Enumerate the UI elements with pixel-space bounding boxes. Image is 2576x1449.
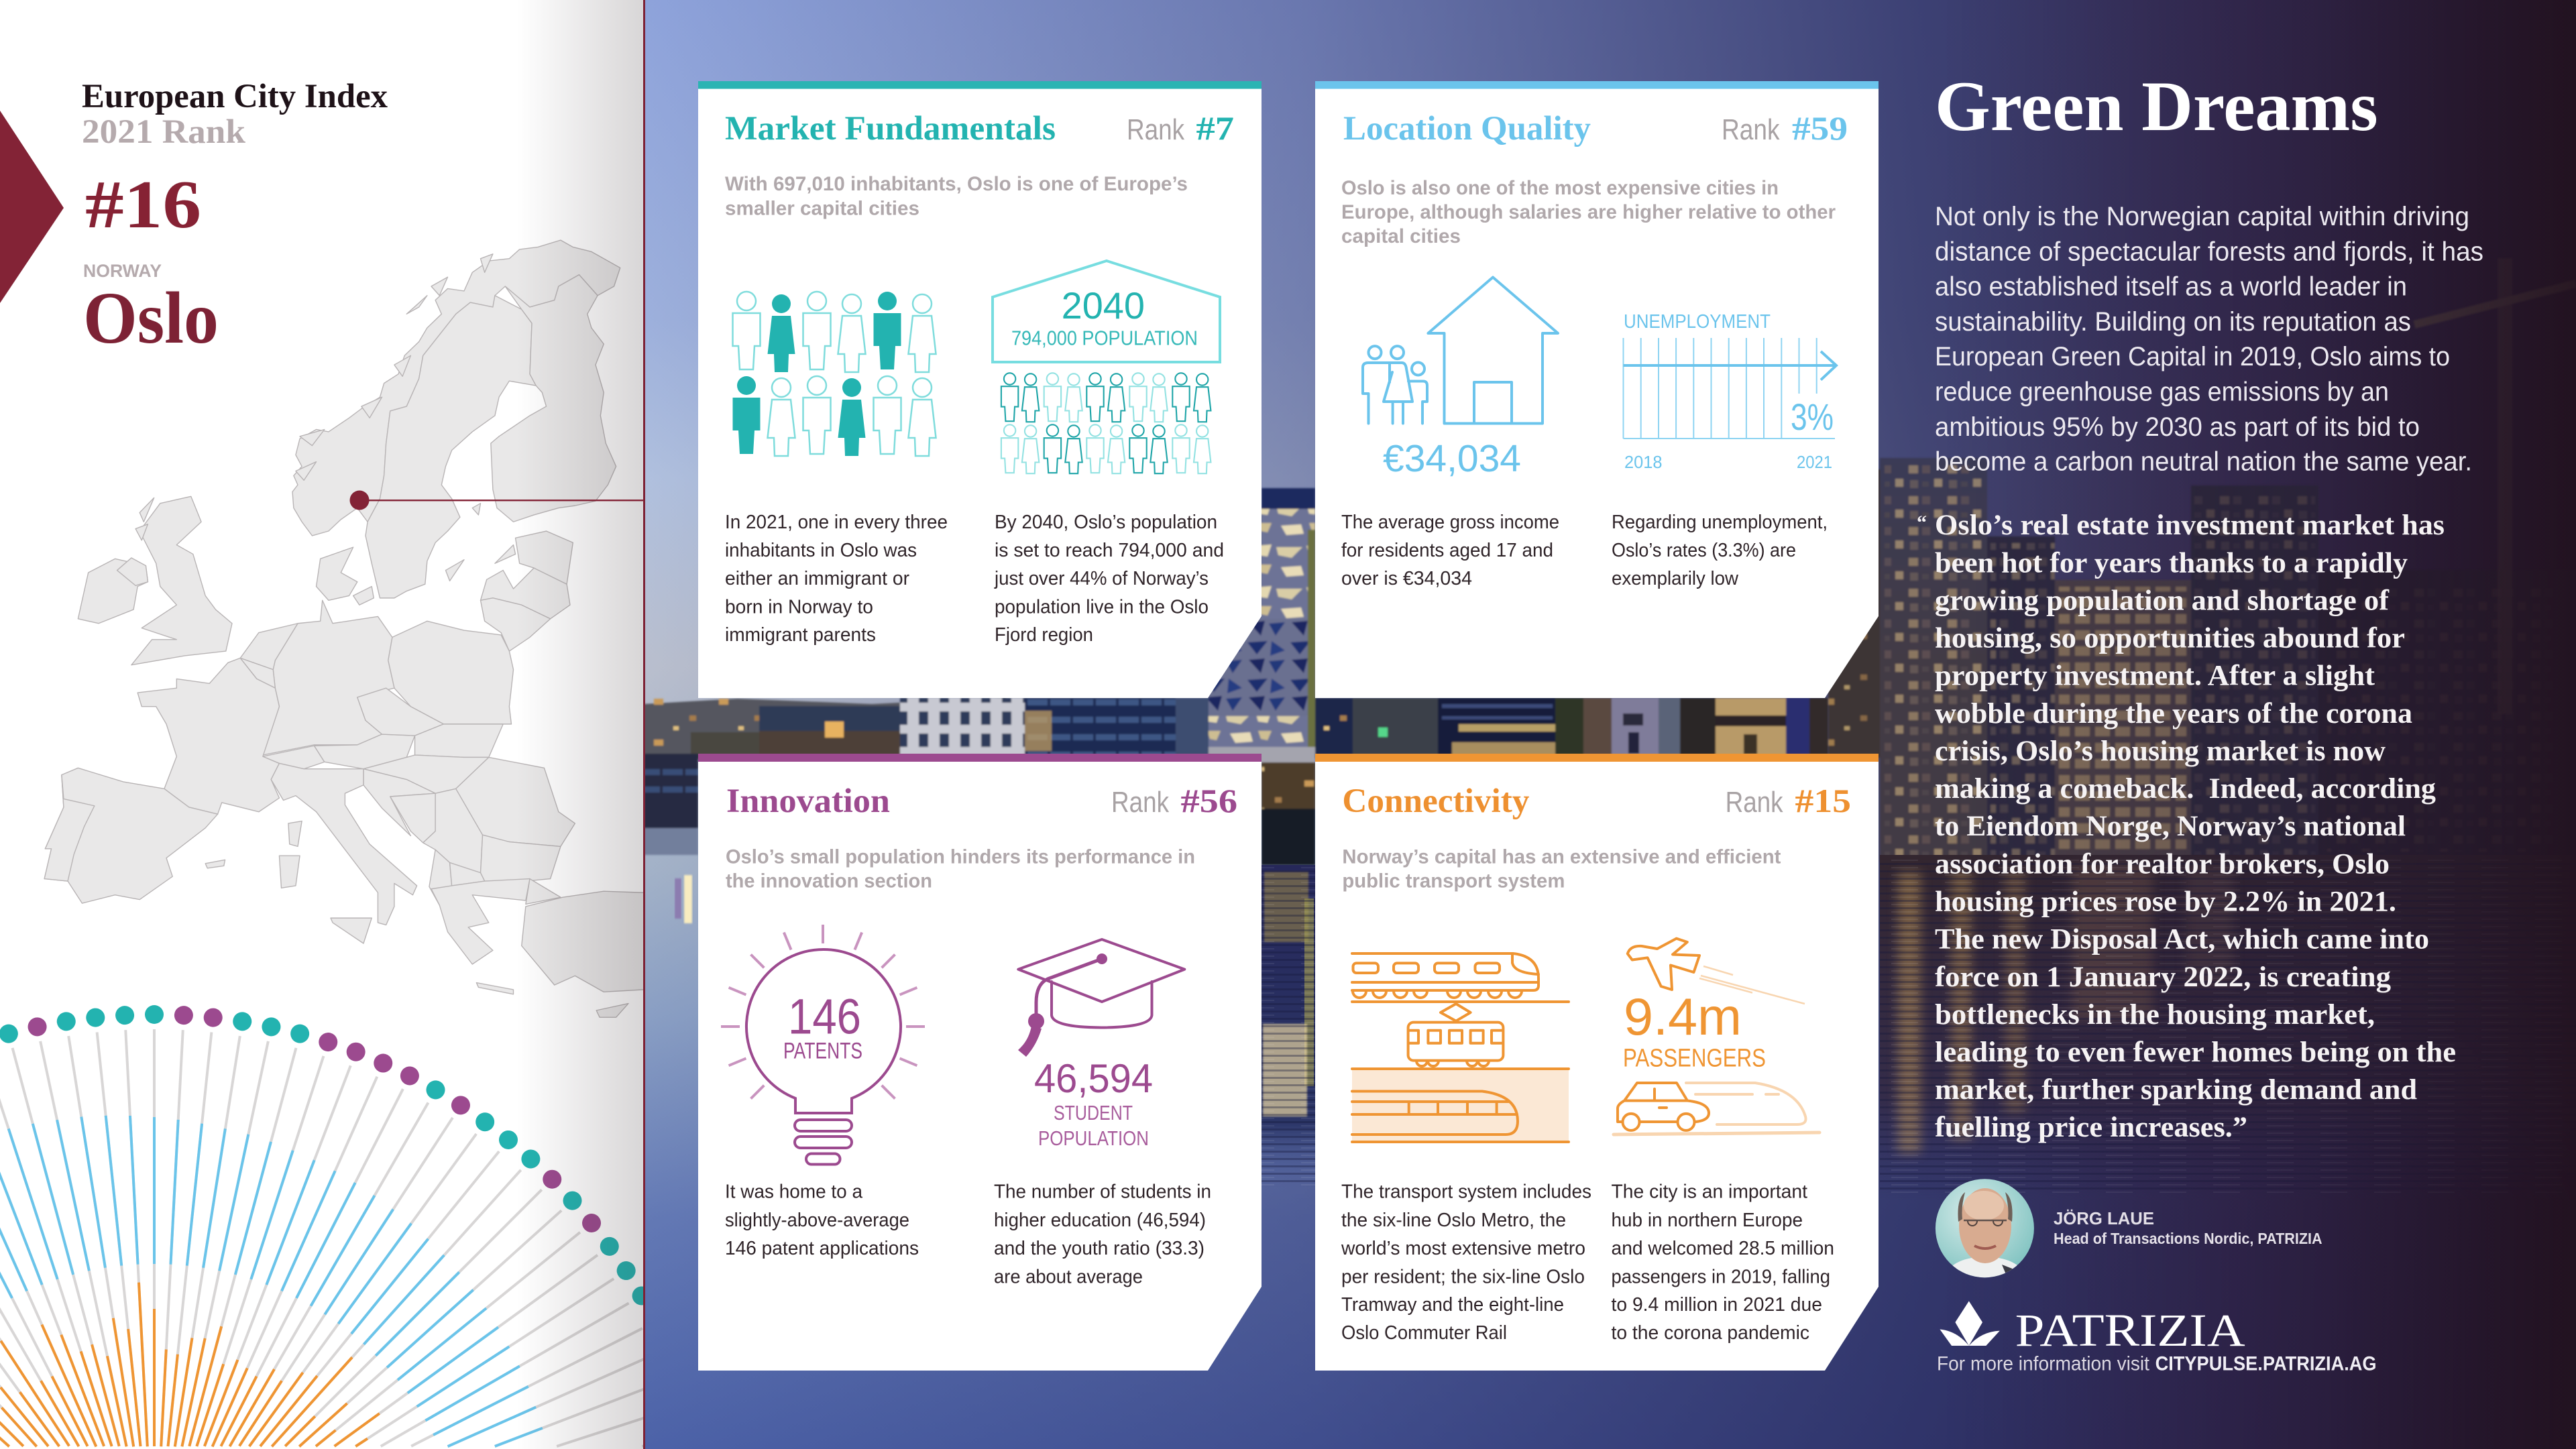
body text: immigrants: born in Norway to — [725, 597, 873, 618]
portrait of Jörg Laue — [1936, 1179, 2034, 1278]
body text: population forecast: just over 44% of Norway’s — [994, 568, 1209, 589]
body text: immigrants — [725, 512, 948, 646]
body text: transport system: The transport system includes — [1341, 1181, 1591, 1203]
body text: immigrants: In 2021, one in every three — [725, 512, 948, 533]
body text: unemployment: Regarding unemployment, — [1612, 512, 1828, 533]
left panel: white index column — [0, 0, 683, 1449]
pull quote: housing, so opportunities abound for — [1935, 623, 2405, 654]
rank — [1127, 109, 1234, 147]
body text: air passengers: to 9.4 million in 2021 due — [1611, 1294, 1822, 1316]
radial city ranking chart — [0, 1005, 683, 1449]
panel: Innovation — [698, 754, 1262, 1371]
pull quote: property investment. After a slight — [1935, 660, 2375, 692]
map of Europe — [44, 240, 644, 1017]
rank: Rank — [1726, 786, 1783, 819]
intro paragraph: become a carbon neutral nation the same year. — [1935, 447, 2472, 477]
heading: Connectivity — [1342, 783, 1529, 820]
body text: income: The average gross income — [1341, 512, 1559, 533]
icon: train, tram and metro — [1352, 953, 1569, 1142]
student population figures: POPULATION — [1038, 1126, 1149, 1150]
PATRIZIA logo: PATRIZIA — [2015, 1305, 2245, 1356]
quote attribution — [2054, 1208, 2322, 1247]
panel: Connectivity — [1315, 754, 1879, 1371]
body text: air passengers: to the corona pandemic — [1611, 1322, 1809, 1344]
body text: air passengers: and welcomed 28.5 million — [1611, 1238, 1834, 1259]
icon: projected population — [1001, 373, 1211, 473]
summary — [1342, 846, 1781, 892]
body text: income: over is €34,034 — [1341, 568, 1472, 589]
icon: family and house — [1363, 278, 1558, 424]
pull quote: force on 1 January 2022, is creating — [1935, 962, 2392, 993]
pull quote: making a comeback. Indeed, according — [1935, 773, 2437, 805]
body text: transport system: Oslo Commuter Rail — [1341, 1322, 1507, 1344]
pull quote: leading to even fewer homes being on the — [1935, 1037, 2456, 1068]
intro paragraph: distance of spectacular forests and fjords, it has — [1935, 237, 2483, 266]
intro paragraph: European Green Capital in 2019, Oslo aims to — [1935, 342, 2450, 371]
pull quote: housing prices rose by 2.2% in 2021. — [1935, 886, 2396, 918]
body text: population forecast — [994, 512, 1224, 646]
student population figures: 46,594 — [1034, 1056, 1153, 1101]
pull quote: fuelling price increases.” — [1935, 1112, 2247, 1143]
website link — [1937, 1353, 2377, 1375]
body text: air passengers — [1611, 1181, 1834, 1344]
panel: Location Quality — [1315, 81, 1879, 698]
rank: Rank — [1722, 113, 1780, 146]
overall rank number: #16 — [85, 167, 201, 243]
rank arrow — [0, 111, 64, 303]
summary — [726, 846, 1195, 892]
city name: Oslo — [83, 277, 219, 359]
heading: Location Quality — [1343, 110, 1591, 148]
icon: 2040 population house — [993, 261, 1220, 362]
body text: transport system: the six-line Oslo Metro, the — [1341, 1210, 1566, 1231]
panel edge line — [643, 0, 645, 1449]
icon: light bulb with patents — [721, 925, 925, 1164]
quote attribution: Head of Transactions Nordic, PATRIZIA — [2054, 1230, 2322, 1247]
intro paragraph: Not only is the Norwegian capital within driving — [1935, 202, 2469, 231]
intro paragraph: sustainability. Building on its reputation as — [1935, 307, 2411, 337]
body text: students: and the youth ratio (33.3) — [994, 1238, 1205, 1259]
chart: unemployment timeline: UNEMPLOYMENT — [1624, 311, 1771, 333]
pull quote: crisis, Oslo’s housing market is now — [1935, 736, 2386, 767]
Oslo map marker and leader line — [350, 491, 644, 510]
rank — [1726, 782, 1851, 819]
title: Green Dreams — [1935, 67, 2378, 146]
heading: 2021 Rank: 2021 Rank — [82, 113, 246, 151]
country label: NORWAY — [83, 261, 162, 281]
body text: population forecast: By 2040, Oslo’s population — [995, 512, 1217, 533]
pull quote: market, further sparking demand and — [1935, 1074, 2417, 1106]
summary: public transport system — [1342, 870, 1565, 892]
icon: light bulb with patents: PATENTS — [783, 1038, 862, 1063]
summary: With 697,010 inhabitants, Oslo is one of Europe’s — [725, 173, 1188, 195]
rank — [1722, 109, 1848, 147]
rank — [1111, 782, 1237, 819]
pull quote: to Eiendom Norge, Norway’s national — [1935, 811, 2406, 842]
student population figures: STUDENT — [1054, 1101, 1133, 1124]
rank: #59 — [1792, 109, 1848, 147]
student population figures — [1034, 1056, 1153, 1150]
rank: #7 — [1196, 109, 1234, 147]
heading: European City Index: European City Index — [82, 78, 388, 115]
summary: smaller capital cities — [725, 197, 919, 220]
pull quote: “ — [1917, 512, 1927, 534]
summary: the innovation section — [726, 870, 932, 892]
body text: students: are about average — [994, 1266, 1143, 1287]
icon: light bulb with patents: 146 — [788, 989, 861, 1045]
body text: air passengers: hub in northern Europe — [1611, 1210, 1803, 1231]
heading: Market Fundamentals — [725, 110, 1056, 148]
pull quote: wobble during the years of the corona — [1935, 698, 2412, 730]
rank: #56 — [1180, 782, 1237, 819]
summary — [725, 173, 1188, 220]
body text: patents: 146 patent applications — [725, 1238, 919, 1259]
quote attribution: JÖRG LAUE — [2054, 1208, 2154, 1228]
pull quote: The new Disposal Act, which came into — [1935, 924, 2429, 955]
chart: unemployment timeline: 2018 — [1624, 452, 1662, 472]
chart: unemployment timeline: 2021 — [1797, 452, 1832, 472]
rank: Rank — [1111, 786, 1170, 819]
body text: patents — [725, 1181, 919, 1259]
rank: Rank — [1127, 113, 1185, 146]
pull quote — [1917, 510, 2456, 1143]
intro paragraph: ambitious 95% by 2030 as part of its bid to — [1935, 412, 2420, 442]
summary: Europe, although salaries are higher relative to other — [1341, 201, 1836, 223]
intro paragraph: also established itself as a world leader in — [1935, 272, 2407, 302]
summary: Oslo’s small population hinders its performance in — [726, 846, 1195, 868]
body text: air passengers: passengers in 2019, falling — [1611, 1266, 1830, 1287]
body text: income — [1341, 512, 1559, 589]
passenger figures: PASSENGERS — [1623, 1045, 1766, 1073]
icon: 2040 population house: 794,000 POPULATION — [1011, 327, 1198, 350]
heading: Innovation — [726, 783, 890, 820]
body text: immigrants: immigrant parents — [725, 624, 876, 646]
passenger figures — [1623, 987, 1766, 1073]
icon: aeroplane — [1628, 939, 1805, 1004]
intro paragraph: reduce greenhouse gas emissions by an — [1935, 378, 2389, 407]
chart: unemployment timeline: 3% — [1791, 396, 1834, 438]
pull quote: been hot for years thanks to a rapidly — [1935, 547, 2408, 579]
website link: CITYPULSE.PATRIZIA.AG — [2155, 1353, 2377, 1375]
body text: population forecast: is set to reach 794,000 and — [995, 540, 1224, 561]
income figure: €34,034 — [1383, 437, 1521, 480]
body text: population forecast: Fjord region — [995, 624, 1093, 646]
summary — [1341, 177, 1836, 247]
passenger figures: 9.4m — [1624, 987, 1742, 1046]
body text: immigrants: either an immigrant or — [725, 568, 909, 589]
summary: capital cities — [1341, 225, 1461, 247]
body text: patents: It was home to a — [725, 1181, 863, 1203]
PATRIZIA logo — [1940, 1301, 2245, 1356]
intro paragraph — [1935, 202, 2483, 477]
summary: Norway’s capital has an extensive and efficient — [1342, 846, 1781, 868]
pull quote: Oslo’s real estate investment market has — [1935, 510, 2445, 541]
body text: income: for residents aged 17 and — [1341, 540, 1553, 561]
body text: students: The number of students in — [994, 1181, 1211, 1203]
icon: 2040 population house: 2040 — [1062, 284, 1145, 327]
body text: transport system — [1341, 1181, 1591, 1344]
pull quote: association for realtor brokers, Oslo — [1935, 849, 2390, 880]
background photo: Oslo skyline at dusk — [644, 0, 2576, 1449]
icon: car and fast train — [1614, 1083, 1819, 1135]
body text: immigrants: inhabitants in Oslo was — [725, 540, 917, 561]
body text: unemployment — [1612, 512, 1828, 589]
body text: population forecast: population live in the Oslo — [995, 597, 1209, 618]
icon: people, one in three filled — [732, 292, 936, 456]
body text: unemployment: exemplarily low — [1612, 568, 1739, 589]
body text: students — [994, 1181, 1211, 1287]
right column: Green Dreams — [1917, 67, 2483, 1375]
body text: patents: slightly-above-average — [725, 1210, 909, 1231]
panel: Market Fundamentals — [698, 81, 1262, 698]
rank: #15 — [1795, 782, 1851, 819]
chart: unemployment timeline — [1623, 311, 1836, 472]
website link: For more information visit — [1937, 1353, 2150, 1375]
body text: unemployment: Oslo’s rates (3.3%) are — [1612, 540, 1796, 561]
body text: transport system: per resident; the six-line Oslo — [1341, 1266, 1585, 1287]
pull quote: growing population and shortage of — [1935, 585, 2390, 617]
body text: air passengers: The city is an important — [1611, 1181, 1807, 1203]
body text: students: higher education (46,594) — [994, 1210, 1206, 1231]
summary: Oslo is also one of the most expensive cities in — [1341, 177, 1779, 199]
icon: graduation cap — [1018, 939, 1184, 1057]
pull quote: bottlenecks in the housing market, — [1935, 999, 2375, 1031]
body text: transport system: world’s most extensive metro — [1341, 1238, 1585, 1259]
body text: transport system: Tramway and the eight-line — [1341, 1294, 1564, 1316]
